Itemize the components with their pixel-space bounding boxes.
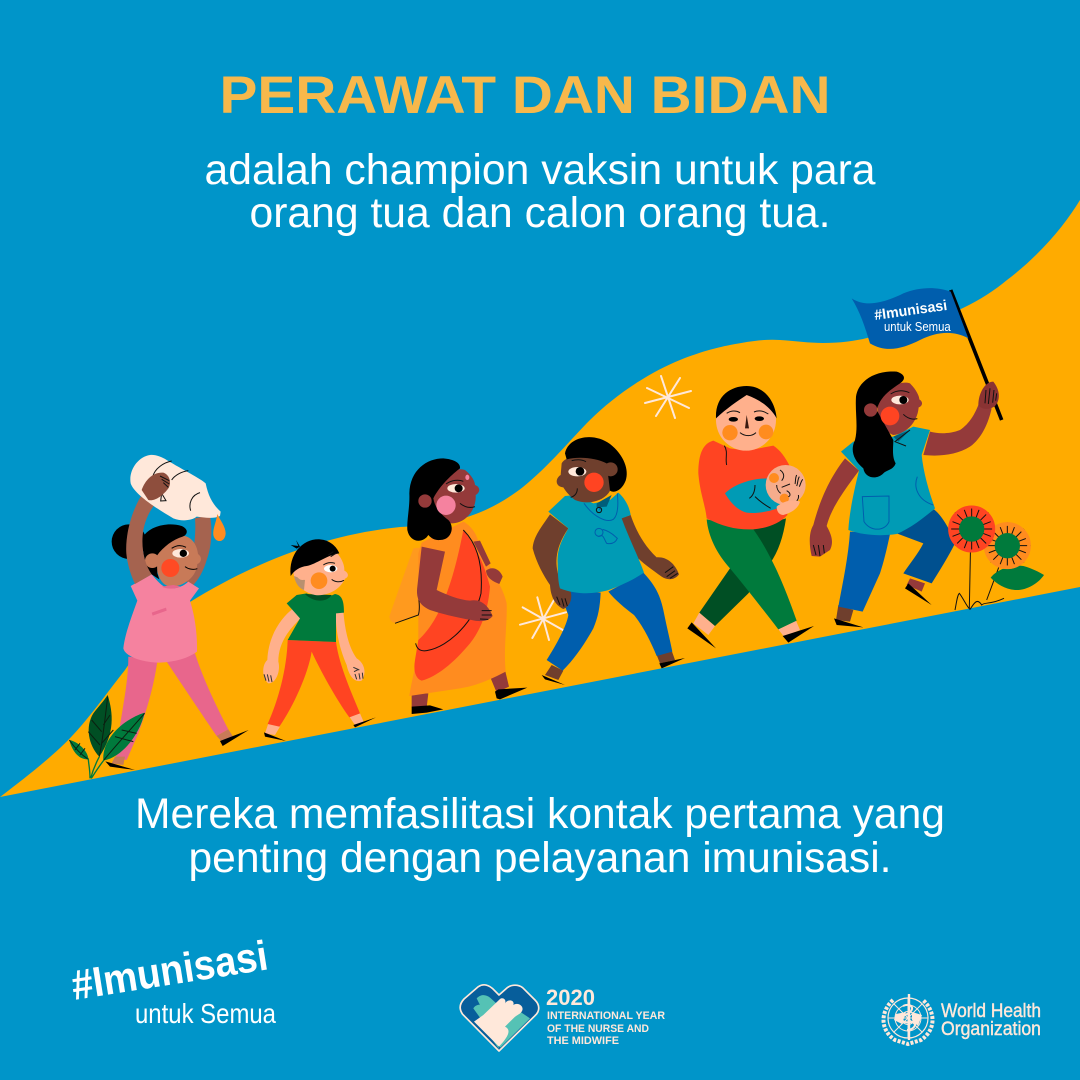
hand xyxy=(978,382,999,409)
bottom statement xyxy=(135,790,945,882)
cheek xyxy=(881,407,899,425)
hand on bottle xyxy=(142,473,170,500)
back leg xyxy=(699,518,786,626)
leaf xyxy=(991,566,1044,590)
pockets xyxy=(862,477,933,529)
hair xyxy=(716,386,777,418)
shirt xyxy=(123,574,199,663)
subtitle: adalah champion vaksin untuk para xyxy=(204,146,876,194)
flag xyxy=(852,288,968,349)
figure: nurse with stethoscope xyxy=(533,437,685,685)
eye xyxy=(447,484,465,493)
mother hand xyxy=(777,500,800,515)
drop xyxy=(213,514,226,541)
eye xyxy=(891,396,909,404)
hair xyxy=(143,524,187,579)
subtitle: orang tua dan calon orang tua. xyxy=(250,189,830,237)
year: 2020 xyxy=(546,985,595,1010)
right arm xyxy=(336,612,364,681)
stethoscope xyxy=(584,493,618,544)
eye xyxy=(324,565,337,572)
bindi xyxy=(465,475,469,480)
logo text: INTERNATIONAL YEAR xyxy=(547,1010,665,1022)
organization name: Organization xyxy=(941,1019,1041,1040)
face xyxy=(431,469,479,523)
face xyxy=(878,383,922,435)
head xyxy=(716,389,776,451)
ankles xyxy=(693,613,800,637)
hair xyxy=(290,539,339,576)
ankles xyxy=(836,605,853,622)
shoes xyxy=(264,717,376,741)
shirt xyxy=(841,427,935,535)
front leg xyxy=(707,519,797,629)
organization name xyxy=(941,1001,1041,1040)
head xyxy=(293,546,348,595)
flag pole xyxy=(951,290,1002,420)
cheeks xyxy=(722,425,738,440)
cheek xyxy=(436,496,456,515)
organization name: World Health xyxy=(941,1001,1041,1022)
logo text: OF THE NURSE AND xyxy=(547,1023,649,1035)
facial features xyxy=(729,417,738,422)
eye xyxy=(568,467,586,476)
right arm xyxy=(621,515,679,579)
baby blanket xyxy=(725,478,782,513)
shoes xyxy=(105,730,249,770)
logo: international year of the nurse and the midwife xyxy=(460,985,665,1051)
baby head xyxy=(766,465,806,505)
near arm xyxy=(417,547,493,621)
ankles xyxy=(545,651,675,680)
sparkle: lower star xyxy=(520,597,566,640)
sweater xyxy=(698,441,790,529)
plant: flowers xyxy=(948,506,1044,610)
left arm xyxy=(533,514,571,609)
trousers xyxy=(268,640,360,727)
front leg xyxy=(838,532,890,612)
shoes xyxy=(687,622,814,648)
logo text xyxy=(547,1010,665,1047)
title: PERAWAT DAN BIDAN xyxy=(220,66,830,125)
shoes xyxy=(834,583,932,627)
logo: World Health Organization xyxy=(883,994,1041,1044)
figure: woman pouring from bottle xyxy=(105,455,249,770)
sari xyxy=(409,522,507,696)
eye xyxy=(172,549,189,558)
cheek xyxy=(584,473,604,492)
head xyxy=(156,536,201,587)
flag text: untuk Semua xyxy=(884,320,952,334)
figure: mother carrying baby xyxy=(687,386,814,648)
raised arm xyxy=(126,490,162,584)
sparkle: upper star xyxy=(645,376,691,418)
icon: heart with hands xyxy=(460,985,539,1051)
trousers xyxy=(116,657,157,760)
bottle xyxy=(130,455,221,520)
campaign logo: untuk Semua xyxy=(135,998,276,1029)
yellow hill band xyxy=(0,200,1080,797)
hair xyxy=(853,371,904,477)
shirt xyxy=(287,593,344,642)
figure: leader with flag xyxy=(810,288,1002,627)
red flower xyxy=(948,506,995,552)
back leg xyxy=(897,509,955,583)
far arm xyxy=(473,541,503,584)
ankles xyxy=(265,713,364,735)
figure: child walking xyxy=(263,539,376,741)
campaign logo: #Imunisasi xyxy=(68,931,271,1009)
face xyxy=(557,455,613,502)
stems xyxy=(955,540,1004,610)
figure: pregnant woman in sari xyxy=(389,458,527,714)
shoes xyxy=(412,688,527,714)
left arm xyxy=(263,608,301,683)
raised arm xyxy=(923,405,992,456)
legs xyxy=(412,670,509,707)
left arm xyxy=(810,458,859,557)
hair xyxy=(407,458,460,541)
hair xyxy=(565,437,627,492)
subtitle xyxy=(204,146,876,237)
logo text: THE MIDWIFE xyxy=(547,1035,619,1047)
back arm xyxy=(185,515,211,587)
plant: green leaves bottom left xyxy=(69,695,145,778)
cheek xyxy=(311,572,327,589)
drape xyxy=(389,547,427,623)
bun xyxy=(112,524,146,559)
orange flower xyxy=(984,522,1031,569)
cheek xyxy=(161,559,179,577)
icon: WHO emblem xyxy=(883,994,933,1044)
shirt xyxy=(548,493,644,593)
bottom statement: Mereka memfasilitasi kontak pertama yang xyxy=(135,790,945,838)
trousers xyxy=(547,588,601,671)
bottom statement: penting dengan pelayanan imunisasi. xyxy=(188,834,892,882)
shoes xyxy=(542,658,685,685)
flag text: #Imunisasi xyxy=(873,298,948,324)
